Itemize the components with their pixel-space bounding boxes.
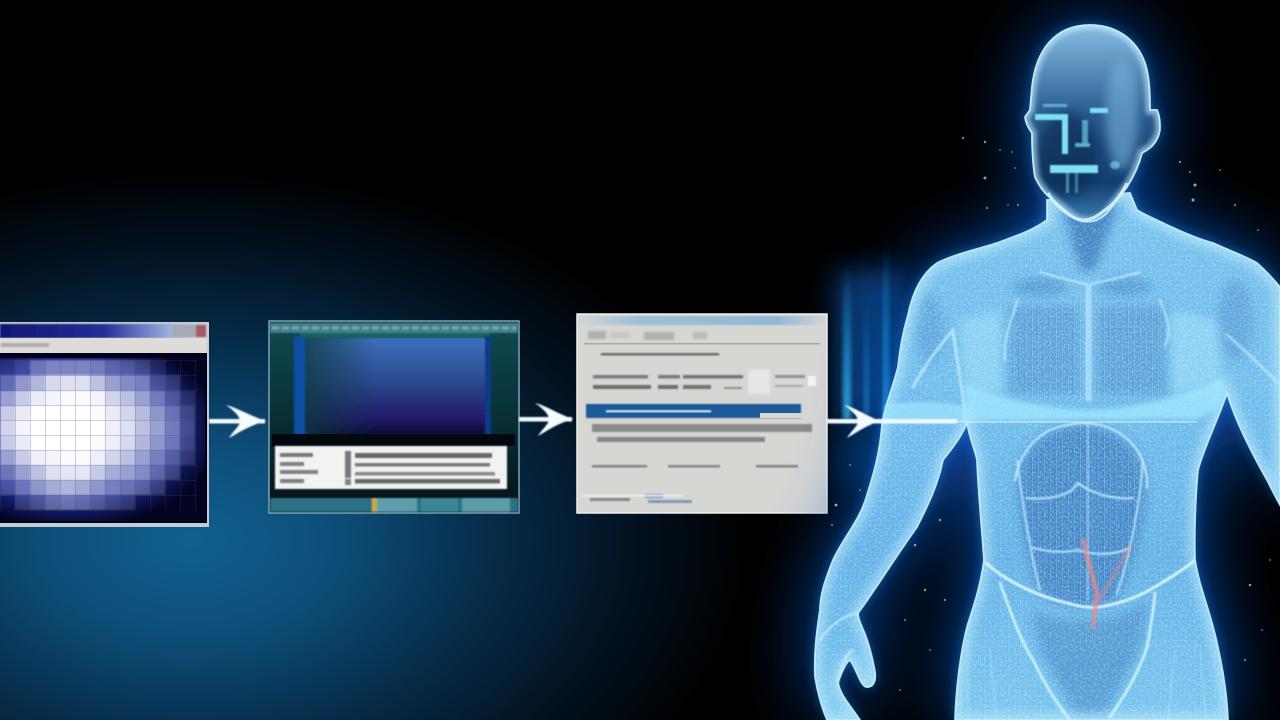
panel: scan data window <box>269 321 519 513</box>
muscle contours <box>820 272 1280 720</box>
heatmap image <box>0 353 207 523</box>
face markers <box>1035 104 1120 193</box>
bottom status bar <box>270 498 518 512</box>
stars and particles <box>831 137 1271 691</box>
arrow 2 <box>519 403 573 436</box>
head <box>1025 25 1160 222</box>
white data table <box>275 446 507 489</box>
arrow 1 <box>209 405 266 438</box>
darker tissue zones <box>916 205 1253 715</box>
window title bar <box>0 324 207 338</box>
inner rim light <box>815 193 1280 720</box>
red accent lines <box>1083 540 1130 627</box>
blue side band <box>294 336 308 436</box>
light streaks behind figure <box>830 245 940 485</box>
window controls <box>172 325 206 337</box>
arrow 3 <box>827 405 957 438</box>
lighter chest sides <box>960 310 1222 395</box>
gradient display <box>305 338 485 434</box>
ruler strip <box>270 323 518 338</box>
body aura <box>815 25 1280 720</box>
panel: heatmap scan window <box>0 322 209 527</box>
jaw line <box>1048 183 1127 220</box>
figure: holographic human body <box>810 25 1280 720</box>
light band across torso <box>880 377 1224 423</box>
report toolbar <box>588 331 707 340</box>
clipped body shading <box>810 190 1280 720</box>
mesh over chest and abdomen <box>960 300 1225 720</box>
torso and limbs <box>815 193 1280 720</box>
speckle texture <box>810 190 1280 720</box>
head shading <box>1025 25 1160 222</box>
panel: report window <box>577 314 827 513</box>
body outline <box>815 193 1280 720</box>
menu bar <box>0 338 207 353</box>
report footer text <box>582 465 798 503</box>
report title bar <box>579 316 825 325</box>
report progress bars <box>586 404 812 442</box>
report text rows <box>593 353 805 389</box>
